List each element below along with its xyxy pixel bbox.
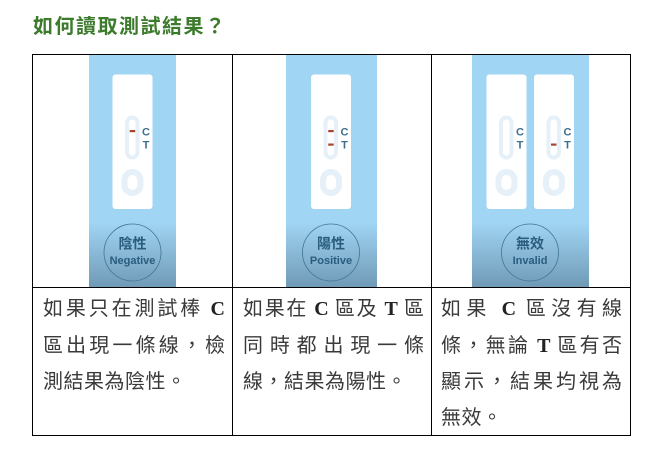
panel: positive result — [286, 54, 377, 288]
text: invalid explanation: 無效。 — [441, 401, 502, 430]
title: 如何讀取測試結果？ — [33, 16, 226, 38]
text: invalid explanation: 顯示，結果均視為 — [441, 365, 622, 394]
text: positive explanation — [243, 292, 424, 394]
panel: positive result: 陽性 — [317, 236, 345, 252]
text: invalid explanation — [441, 292, 622, 430]
text: positive explanation: 如果在 C 區及 T 區 — [243, 292, 424, 321]
text: negative explanation: 測結果為陰性。 — [43, 365, 186, 394]
panel: positive result: Positive — [310, 255, 352, 267]
panel: negative result: C — [142, 126, 150, 138]
panel: invalid result: Invalid — [513, 255, 547, 267]
text: negative explanation: 如果只在測試棒 C — [43, 292, 225, 321]
panel: positive result: T — [341, 140, 348, 152]
panel: negative result: T — [143, 140, 150, 152]
text: positive explanation: 同時都出現一條 — [243, 329, 424, 358]
text: negative explanation: 區出現一條線，檢 — [43, 329, 225, 358]
text: invalid explanation: 條，無論 T 區有否 — [441, 329, 622, 358]
panel: invalid result: T — [517, 140, 524, 152]
text: negative explanation — [43, 292, 225, 394]
panel: invalid result: 無效 — [516, 236, 544, 252]
panel: negative result: 陰性 — [118, 236, 146, 252]
panel: negative result — [89, 54, 176, 288]
text: invalid explanation: 如果 C 區沒有線 — [441, 292, 622, 321]
panel: invalid result: C — [516, 126, 524, 138]
panel: invalid result — [472, 54, 589, 288]
panel: negative result: Negative — [110, 255, 155, 267]
panel: invalid result: T — [564, 140, 571, 152]
panel: invalid result: C — [564, 126, 572, 138]
text: positive explanation: 線，結果為陽性。 — [243, 365, 407, 394]
panel: positive result: C — [341, 126, 349, 138]
